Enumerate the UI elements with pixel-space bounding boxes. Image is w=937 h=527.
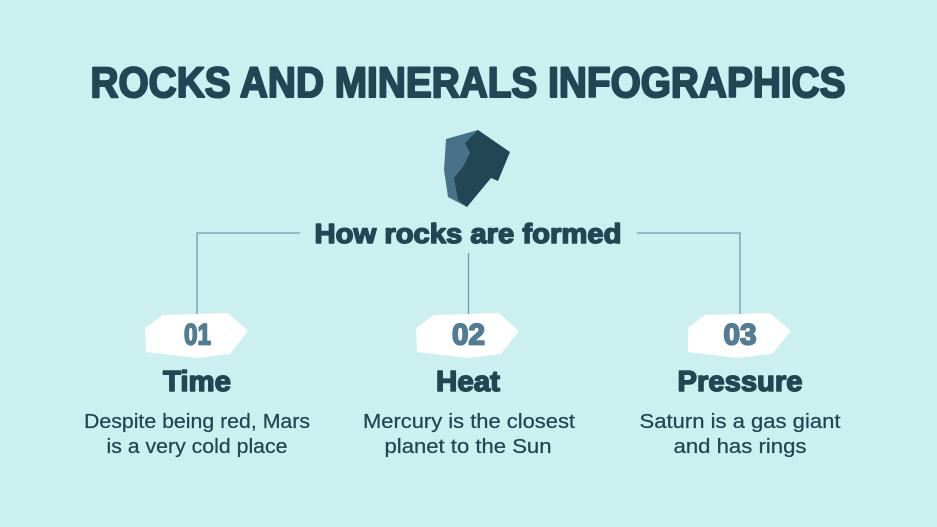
subtitle: How rocks are formed [314, 218, 622, 249]
heading: Pressure: Pressure [678, 366, 802, 398]
description 2: Mercury is the closest [363, 411, 575, 433]
badge 03 [688, 313, 791, 358]
title: ROCKS AND MINERALS INFOGRAPHICS [90, 59, 846, 107]
icon: rock [444, 130, 510, 207]
item 3: pressure [640, 313, 841, 458]
badge 02 [416, 313, 519, 358]
description 3: and has rings [674, 436, 806, 458]
connector: left [197, 233, 300, 314]
number 02: 02 [452, 318, 485, 352]
description 1: Despite being red, Mars [84, 411, 310, 433]
number 03: 03 [724, 318, 756, 352]
item 2: heat [363, 313, 575, 458]
number 01: 01 [184, 318, 211, 352]
description 2: planet to the Sun [384, 436, 552, 458]
description 3 [640, 411, 841, 458]
connector: center [468, 253, 470, 314]
item 1: time [84, 313, 310, 458]
description 3: Saturn is a gas giant [640, 411, 841, 433]
description 1 [84, 411, 310, 458]
heading: Heat: Heat [436, 366, 500, 398]
description 2 [363, 411, 575, 458]
connector: right [637, 233, 740, 314]
heading: Time: Time [163, 366, 231, 398]
badge 01 [145, 313, 248, 358]
description 1: is a very cold place [106, 436, 288, 458]
